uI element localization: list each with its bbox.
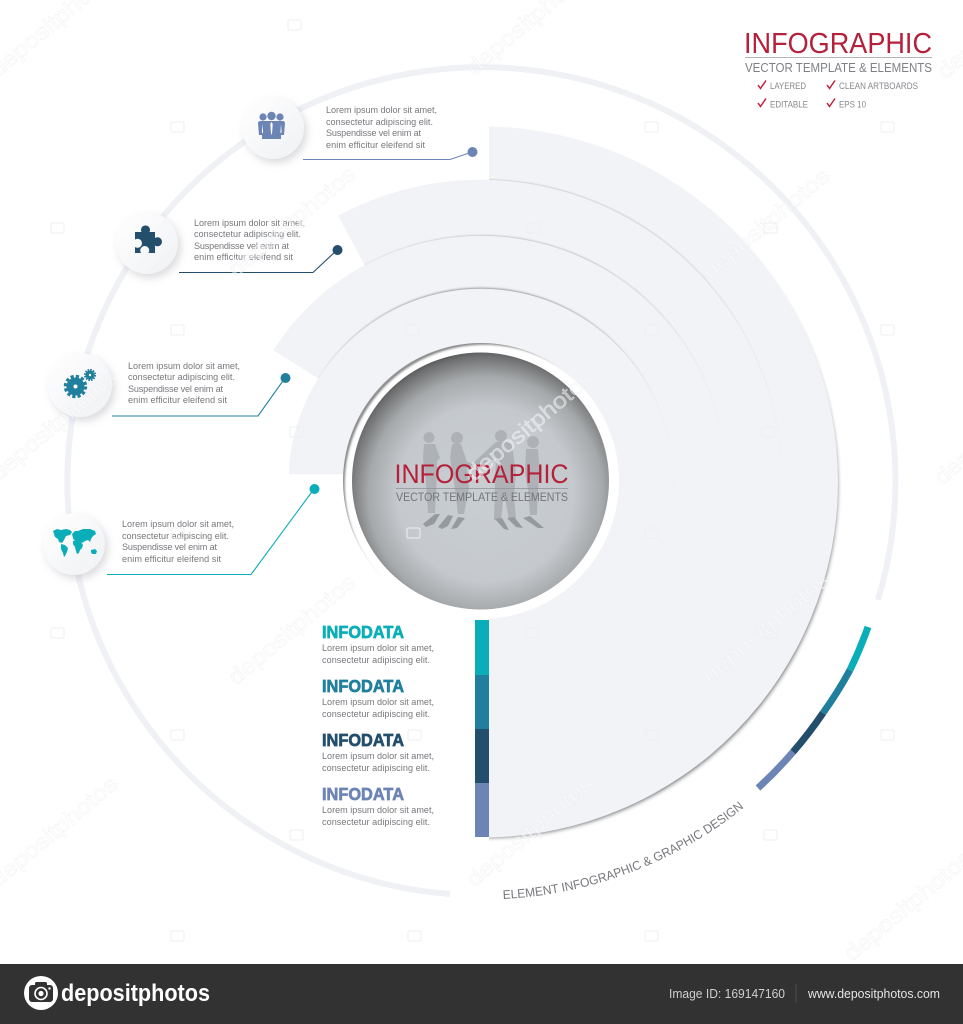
sector 3 shadow bbox=[365, 234, 698, 367]
watermarks: depositphotos bbox=[697, 567, 834, 688]
header subtitle: VECTOR TEMPLATE & ELEMENTS bbox=[745, 60, 932, 75]
color bar bbox=[475, 620, 489, 837]
infodata 2: consectetur adipiscing elit. bbox=[322, 709, 430, 719]
gears text: enim efficitur eleifend sit bbox=[128, 395, 227, 405]
colored arc segments bbox=[758, 627, 868, 788]
infodata 3: Lorem ipsum dolor sit amet, bbox=[322, 751, 434, 761]
person 3 bbox=[472, 430, 516, 520]
header title: INFOGRAPHIC bbox=[744, 28, 932, 60]
sector 4 shadow bbox=[318, 286, 654, 396]
people icon disc bbox=[242, 97, 304, 159]
person 4 bbox=[525, 436, 540, 515]
icon: team bbox=[258, 112, 285, 139]
center title bbox=[394, 459, 568, 504]
infodata list bbox=[322, 622, 434, 827]
world connector bbox=[107, 484, 320, 574]
person 1 bbox=[423, 432, 440, 513]
sector 2 bbox=[338, 180, 782, 782]
item: people bbox=[242, 97, 478, 160]
sector 2 shadow bbox=[489, 179, 763, 374]
image id: Image ID: 169147160 bbox=[669, 987, 785, 1001]
sector 4 bbox=[289, 289, 673, 673]
gears connector bbox=[112, 373, 290, 416]
infodata 1: consectetur adipiscing elit. bbox=[322, 655, 430, 665]
puzzle text: consectetur adipiscing elit. bbox=[194, 229, 301, 239]
logo wordmark: depositphotos bbox=[61, 980, 210, 1007]
people text: consectetur adipiscing elit. bbox=[326, 117, 433, 127]
world text: Lorem ipsum dolor sit amet, bbox=[122, 519, 234, 529]
watermarks: depositphotos bbox=[223, 161, 360, 282]
central hole bbox=[343, 343, 626, 626]
puzzle text bbox=[194, 218, 305, 262]
sector 1 bbox=[489, 127, 838, 837]
panel: stacked sector fan bbox=[274, 126, 838, 838]
center title: INFOGRAPHIC bbox=[394, 459, 568, 489]
feature list: LAYERED bbox=[770, 81, 806, 91]
infodata 2: Lorem ipsum dolor sit amet, bbox=[322, 697, 434, 707]
outer ring bbox=[67, 67, 895, 894]
puzzle text: Lorem ipsum dolor sit amet, bbox=[194, 218, 305, 228]
puzzle text: enim efficitur eleifend sit bbox=[194, 252, 293, 262]
infodata 3: consectetur adipiscing elit. bbox=[322, 763, 430, 773]
infodata 1: INFODATA bbox=[322, 622, 404, 642]
infodata 2 bbox=[322, 676, 434, 719]
people text: Suspendisse vel enim at bbox=[326, 128, 421, 138]
panel: shadow of the outer sector bbox=[489, 296, 841, 840]
infodata 3: INFODATA bbox=[322, 730, 404, 750]
infodata 2: INFODATA bbox=[322, 676, 404, 696]
people connector bbox=[303, 147, 478, 160]
footer bar bbox=[0, 964, 963, 1024]
watermarks: depositphotos bbox=[223, 569, 360, 690]
item: puzzle bbox=[116, 212, 342, 274]
top right header bbox=[744, 28, 932, 110]
infodata 4 bbox=[322, 784, 434, 827]
infodata 1: Lorem ipsum dolor sit amet, bbox=[322, 643, 434, 653]
item: world bbox=[43, 484, 320, 575]
icon: puzzle piece bbox=[135, 225, 162, 253]
infodata 4: consectetur adipiscing elit. bbox=[322, 817, 430, 827]
item: gears bbox=[48, 353, 290, 417]
watermarks: depositphotos bbox=[697, 163, 834, 284]
infodata 4: Lorem ipsum dolor sit amet, bbox=[322, 805, 434, 815]
sector 3 bbox=[274, 236, 726, 726]
world text: enim efficitur eleifend sit bbox=[122, 554, 221, 564]
center title: VECTOR TEMPLATE & ELEMENTS bbox=[396, 490, 568, 504]
puzzle text: Suspendisse vel enim at bbox=[194, 241, 289, 251]
watermarks: depositphotos bbox=[839, 845, 963, 966]
watermarks: depositphotos bbox=[461, 365, 598, 486]
world icon disc bbox=[43, 513, 105, 575]
gears icon disc bbox=[48, 353, 112, 417]
infodata 1 bbox=[322, 622, 434, 665]
feature list bbox=[758, 80, 918, 110]
person 2 bbox=[450, 432, 475, 514]
gears text bbox=[128, 361, 240, 405]
foot shadows bbox=[423, 514, 544, 530]
icon: world map bbox=[53, 529, 97, 557]
world text: consectetur adipiscing elit. bbox=[122, 531, 229, 541]
puzzle connector bbox=[179, 245, 342, 272]
feature list: EDITABLE bbox=[770, 100, 808, 110]
world text bbox=[122, 519, 234, 564]
feature list: CLEAN ARTBOARDS bbox=[839, 81, 918, 91]
silhouettes of business people bbox=[423, 430, 544, 530]
people text: enim efficitur eleifend sit bbox=[326, 140, 425, 150]
gears text: Suspendisse vel enim at bbox=[128, 384, 223, 394]
feature list: EPS 10 bbox=[839, 100, 866, 110]
gears text: consectetur adipiscing elit. bbox=[128, 372, 235, 382]
logo: camera bbox=[24, 976, 58, 1010]
world text: Suspendisse vel enim at bbox=[122, 542, 217, 552]
central gray circle bbox=[352, 352, 609, 610]
people text bbox=[326, 105, 437, 150]
infodata 3 bbox=[322, 730, 434, 773]
puzzle icon disc bbox=[116, 212, 178, 274]
infodata 4: INFODATA bbox=[322, 784, 404, 804]
site url: www.depositphotos.com bbox=[807, 987, 940, 1001]
gears text: Lorem ipsum dolor sit amet, bbox=[128, 361, 240, 371]
icon: gears bbox=[66, 370, 95, 396]
watermarks: depositphotos bbox=[461, 771, 598, 892]
curved caption: ELEMENT INFOGRAPHIC & GRAPHIC DESIGN bbox=[504, 802, 744, 899]
people text: Lorem ipsum dolor sit amet, bbox=[326, 105, 437, 115]
